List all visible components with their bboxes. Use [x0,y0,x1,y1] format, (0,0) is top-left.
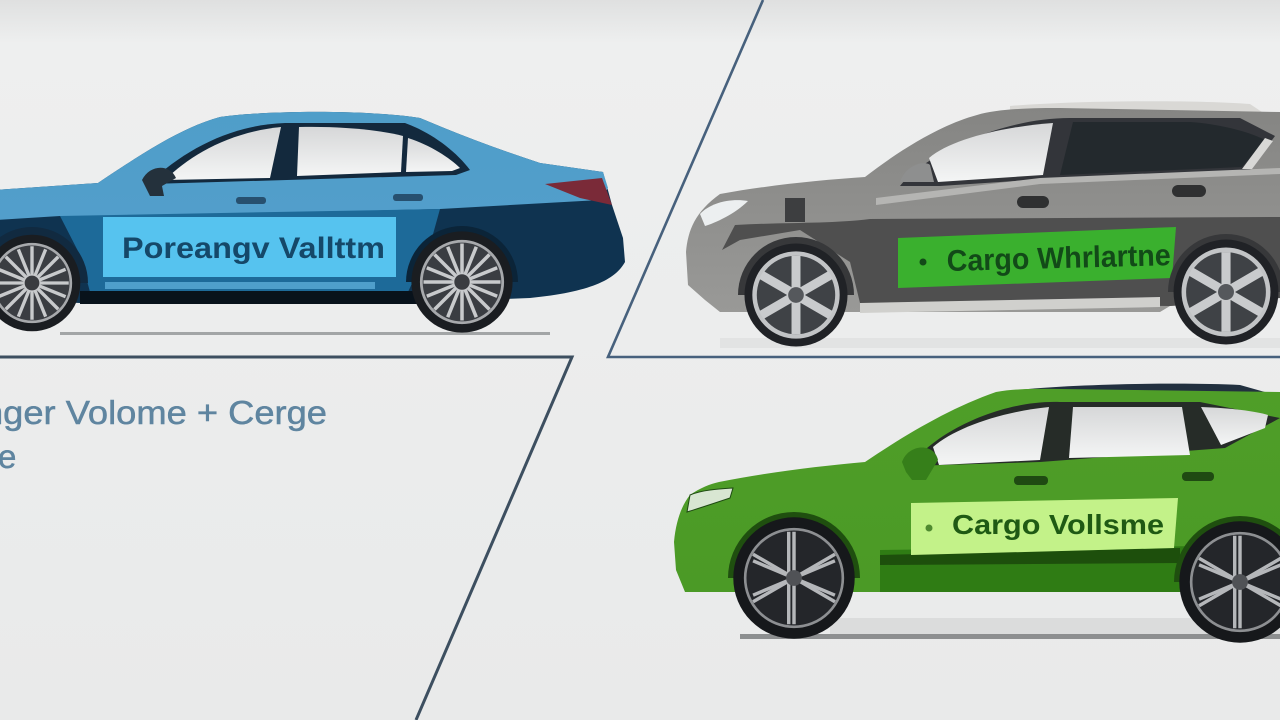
car: gray SUV [686,101,1280,347]
sedan body [0,112,625,303]
car: blue sedan [0,112,625,333]
green suv wheels [728,512,1280,643]
green suv lower trim [880,545,1280,592]
green suv mirror [902,447,938,480]
suv wheels [738,234,1280,347]
label: cargo volume gray [898,227,1176,288]
caption text [0,394,327,475]
green suv door handles [1014,472,1214,485]
suv body [686,108,1280,312]
suv badge mark [785,198,805,222]
green suv windows [910,402,1280,466]
sedan tail light [545,178,612,205]
suv door highlight [876,168,1280,205]
suv headlight [700,200,748,226]
suv door handles [1017,185,1206,208]
suv sill trim [860,297,1160,313]
label: cargo volume green: Cargo Vollsme [952,509,1164,540]
sedan mirror [142,168,176,196]
panel frame: cargo panel [608,0,1280,357]
label: cargo volume green [911,498,1178,555]
suv windows [900,118,1275,186]
label: cargo volume gray: Cargo Whrlartne [946,239,1171,278]
green suv headlight [687,488,733,512]
sedan mid door strip [60,209,440,292]
label: passenger volume: Poreangv Vallttm [122,232,385,265]
car: green SUV [674,384,1280,643]
ground shadows [60,332,1280,639]
green suv body [674,389,1280,592]
green suv roof rail [1000,384,1272,398]
sedan upper panel [0,112,608,220]
panel frame: passenger panel [0,357,572,720]
sedan windows [150,123,470,184]
sedan wheels [0,226,518,333]
suv roof rail [1010,101,1262,112]
suv lower dark panel [722,217,1280,306]
label: passenger volume [103,217,396,277]
sedan bottom strips [105,282,375,289]
sedan door handles [236,194,423,204]
